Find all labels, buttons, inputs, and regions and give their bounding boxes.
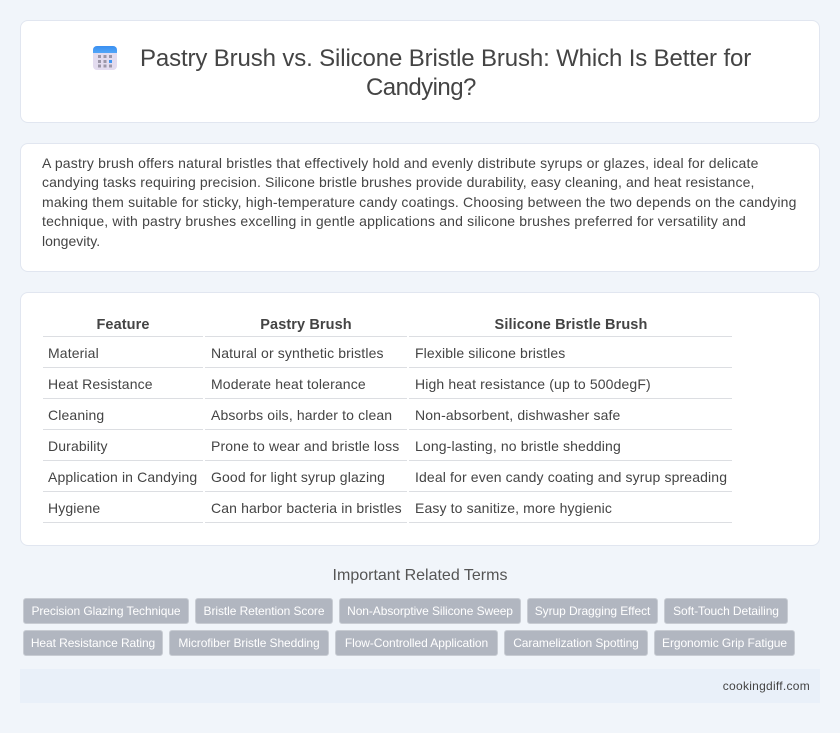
comparison table: High heat resistance (up to 500degF): [415, 376, 651, 392]
comparison table: Durability: [48, 438, 108, 454]
related term tags: Bristle Retention Score: [204, 604, 324, 618]
comparison table: [43, 317, 732, 523]
related term tags: Caramelization Spotting: [513, 636, 639, 650]
related term tags: [23, 598, 795, 656]
panel: header: [20, 20, 820, 123]
comparison table: Application in Candying: [48, 469, 197, 485]
related term tags: Non-Absorptive Silicone Sweep: [347, 604, 513, 618]
comparison table: Pastry Brush: [260, 317, 352, 333]
panel: description: [20, 143, 820, 272]
related term tags: Ergonomic Grip Fatigue: [662, 636, 787, 650]
footer bar: [20, 669, 820, 703]
related term tags: Soft-Touch Detailing: [673, 604, 779, 618]
comparison table: Hygiene: [48, 500, 100, 516]
comparison table: Material: [48, 345, 99, 361]
description text: A pastry brush offers natural bristles that effectively hold and evenly distribute syrups or glazes, ideal for delicate: [42, 155, 759, 171]
comparison table: Prone to wear and bristle loss: [211, 438, 399, 454]
comparison table: Good for light syrup glazing: [211, 469, 385, 485]
comparison table: Cleaning: [48, 407, 104, 423]
comparison table: Non-absorbent, dishwasher safe: [415, 407, 620, 423]
related term tags: Heat Resistance Rating: [31, 636, 155, 650]
panel: comparison table: [20, 292, 820, 546]
comparison table: Feature: [96, 317, 150, 333]
title: Pastry Brush vs. Silicone Bristle Brush: Which Is Better for: [140, 45, 751, 72]
icon: calendar: [93, 46, 117, 70]
related term tags: Flow-Controlled Application: [345, 636, 488, 650]
comparison table: Silicone Bristle Brush: [495, 317, 647, 333]
comparison table: Long-lasting, no bristle shedding: [415, 438, 621, 454]
related term tags: Microfiber Bristle Shedding: [178, 636, 320, 650]
description text: [42, 155, 797, 249]
footer credit: cookingdiff.com: [723, 679, 810, 693]
comparison table: Easy to sanitize, more hygienic: [415, 500, 612, 516]
comparison table: Moderate heat tolerance: [211, 376, 366, 392]
related term tags: Precision Glazing Technique: [31, 604, 181, 618]
description text: candying tasks requiring precision. Silicone bristle brushes provide durability, easy cleaning, and heat resistance,: [42, 174, 754, 190]
comparison table: Natural or synthetic bristles: [211, 345, 384, 361]
comparison table: Ideal for even candy coating and syrup spreading: [415, 469, 727, 485]
title: Candying?: [366, 74, 476, 101]
related term tags: Syrup Dragging Effect: [535, 604, 650, 618]
heading: related terms: Important Related Terms: [333, 567, 507, 584]
description text: making them suitable for sticky, high-temperature candy coatings. Choosing between the two depends on the candying: [42, 194, 797, 210]
comparison table: Can harbor bacteria in bristles: [211, 500, 402, 516]
description text: longevity.: [42, 233, 100, 249]
comparison table: Heat Resistance: [48, 376, 153, 392]
comparison table: Flexible silicone bristles: [415, 345, 565, 361]
title: [140, 45, 751, 101]
description text: technique, with pastry brushes excelling in gentle applications and silicone brushes preferred for versatility and: [42, 213, 746, 229]
comparison table: Absorbs oils, harder to clean: [211, 407, 392, 423]
